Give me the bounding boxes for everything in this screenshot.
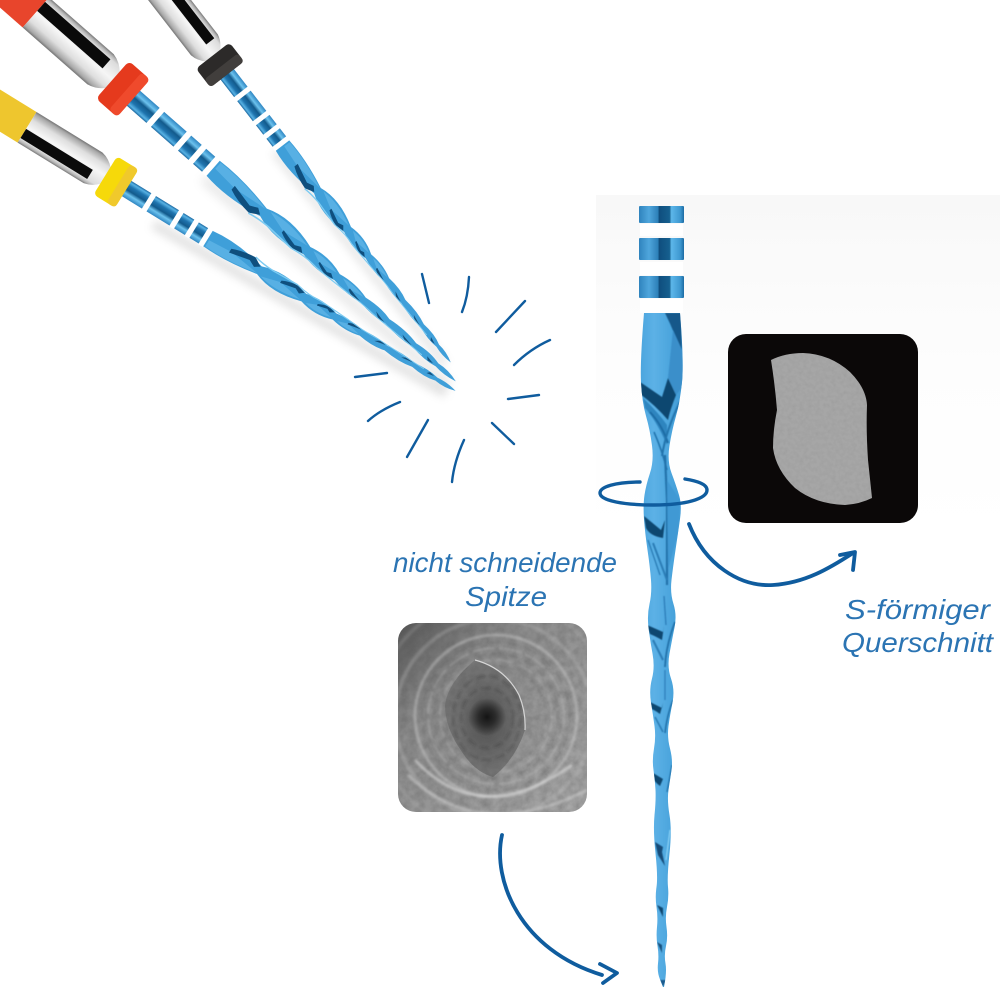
label: S-förmiger Querschnitt	[842, 594, 994, 658]
label: S-förmiger Querschnitt: S-förmiger	[845, 594, 992, 625]
cross-section panel	[728, 334, 918, 523]
fourth lobe	[650, 702, 663, 714]
background panel behind main file	[596, 195, 1000, 535]
second lobe	[665, 455, 667, 585]
fifth lobe	[653, 773, 663, 786]
black-stopper file	[99, 0, 468, 376]
label: S-förmiger Querschnitt: Querschnitt	[842, 627, 994, 658]
upper flute	[664, 313, 682, 350]
black stopper	[196, 43, 244, 87]
rotation ring	[600, 479, 707, 505]
yellow stopper	[93, 156, 139, 208]
tip arrow	[500, 835, 617, 983]
label: nicht schneidende Spitze: Spitze	[465, 581, 547, 612]
third lobe	[647, 625, 664, 640]
red-stopper file	[0, 0, 472, 400]
tip micrograph panel	[398, 623, 587, 812]
fluted body	[640, 313, 683, 987]
depth stripes	[639, 206, 684, 313]
burst lines around the tips	[355, 274, 550, 482]
red stopper	[96, 61, 150, 117]
label: nicht schneidende Spitze	[393, 547, 617, 612]
inner cone	[445, 660, 525, 777]
lower lobes	[655, 842, 665, 866]
S-shaped cross-section	[771, 353, 872, 505]
label: nicht schneidende Spitze: nicht schneidende	[393, 547, 617, 578]
main vertical file	[639, 206, 684, 987]
yellow-stopper file	[0, 69, 467, 410]
S-curve arrow	[689, 524, 855, 585]
